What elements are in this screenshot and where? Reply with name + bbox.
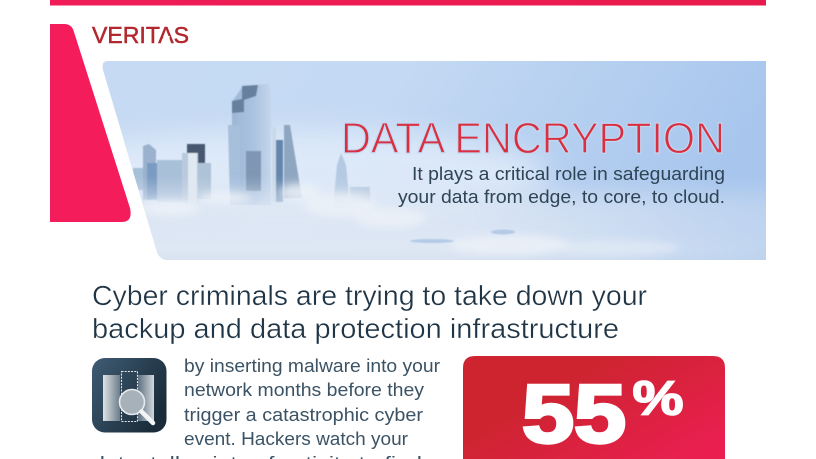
skyline buildings — [133, 84, 370, 208]
hero subtitle: It plays a critical role in safeguarding — [412, 163, 725, 184]
body text: event. Hackers watch your — [184, 429, 408, 449]
main heading: backup and data protection infrastructure — [92, 313, 619, 344]
hero banner: skyline in clouds — [102, 61, 766, 260]
stat panel: 55%: 55 — [522, 367, 626, 459]
hero subtitle — [398, 163, 725, 207]
top accent bar — [50, 0, 766, 6]
stat panel: 55% — [463, 356, 725, 459]
body text: trigger a catastrophic cyber — [184, 405, 423, 425]
icon: magnifier over data — [92, 358, 166, 432]
stat panel: 55%: % — [632, 372, 684, 426]
body text: by inserting malware into your — [184, 356, 440, 376]
Veritas logo: VERITAS — [92, 22, 189, 48]
red slanted side shape — [50, 24, 131, 222]
cloud layer — [137, 180, 766, 260]
main heading: Cyber criminals are trying to take down your — [92, 280, 647, 311]
main heading — [92, 280, 647, 344]
hero subtitle: your data from edge, to core, to cloud. — [398, 186, 725, 207]
body text: network months before they — [184, 380, 424, 400]
hero title: DATA ENCRYPTION — [341, 114, 725, 163]
body text — [92, 356, 440, 459]
